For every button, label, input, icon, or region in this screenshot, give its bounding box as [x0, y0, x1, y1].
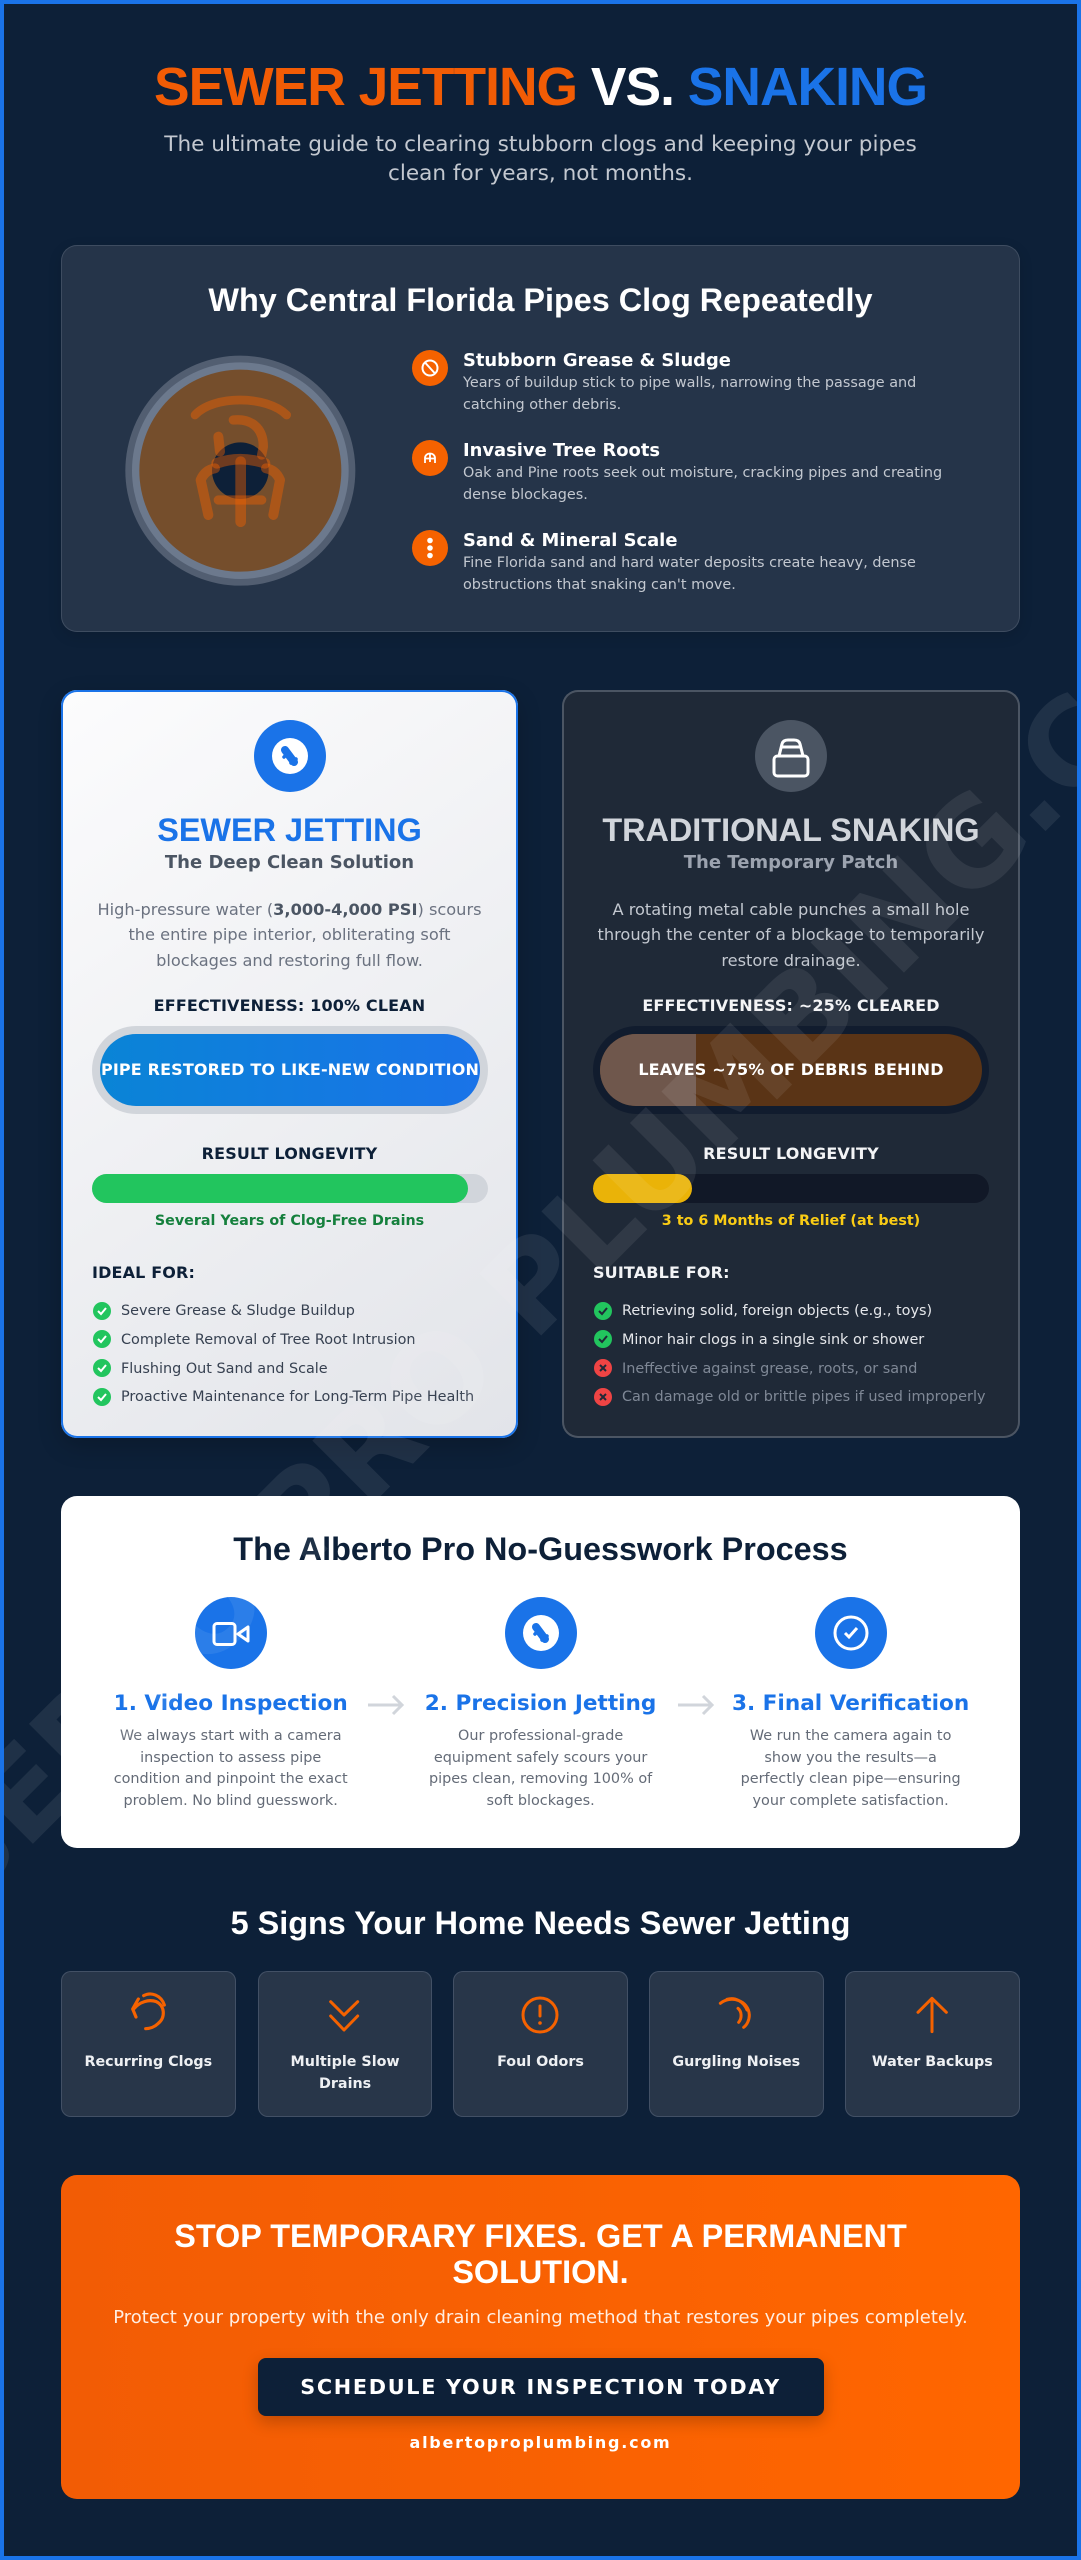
- effectiveness label: EFFECTIVENESS: ~25% CLEARED: [642, 996, 940, 1015]
- item: Minor hair clogs in a single sink or shower: [622, 1332, 924, 1348]
- description: [598, 900, 984, 970]
- cause description: [463, 465, 942, 503]
- item: Complete Removal of Tree Root Intrusion: [121, 1332, 416, 1348]
- step description: We always start with a camera: [120, 1728, 342, 1744]
- pipe text: PIPE RESTORED TO LIKE-NEW CONDITION: [101, 1060, 479, 1079]
- panel: call to action: [61, 2175, 1020, 2499]
- cause description: [463, 555, 916, 593]
- subtitle: [164, 132, 917, 186]
- step description: your complete satisfaction.: [753, 1793, 949, 1809]
- label: Foul Odors: [497, 2054, 584, 2070]
- cause title: Sand & Mineral Scale: [463, 530, 677, 551]
- subtitle: The ultimate guide to clearing stubborn clogs and keeping your pipes: [164, 132, 917, 157]
- cta heading: STOP TEMPORARY FIXES. GET A PERMANENT: [174, 2218, 907, 2254]
- checklist: suitable for: [594, 1302, 985, 1406]
- item: Proactive Maintenance for Long-Term Pipe Health: [121, 1389, 474, 1405]
- pipe fill: [100, 1034, 480, 1106]
- description: the entire pipe interior, obliterating soft: [128, 925, 451, 944]
- longevity label: RESULT LONGEVITY: [202, 1144, 377, 1163]
- step title: 1. Video Inspection: [114, 1691, 348, 1716]
- cause description: obstructions that snaking can't move.: [463, 577, 736, 593]
- item: Ineffective against grease, roots, or sand: [622, 1361, 917, 1377]
- effectiveness label: EFFECTIVENESS: 100% CLEAN: [154, 996, 425, 1015]
- step description: [114, 1728, 348, 1809]
- icon: snake tool: [755, 720, 827, 792]
- pipe diagram: 25% cleared: [593, 1026, 989, 1114]
- description: blockages and restoring full flow.: [156, 951, 423, 970]
- icon: dots: [412, 530, 448, 566]
- label: Multiple Slow: [291, 2054, 400, 2070]
- cta text: Protect your property with the only drain cleaning method that restores your pipes completely.: [113, 2306, 968, 2328]
- cta heading: SOLUTION.: [452, 2254, 629, 2290]
- description: [97, 900, 482, 970]
- step description: pipes clean, removing 100% of: [429, 1771, 652, 1787]
- longevity label: RESULT LONGEVITY: [703, 1144, 879, 1163]
- pipe fill: [600, 1034, 982, 1106]
- cause title: Invasive Tree Roots: [463, 440, 660, 461]
- step 2: [425, 1597, 656, 1809]
- label: Water Backups: [872, 2054, 993, 2070]
- heading: SEWER JETTING: [157, 812, 422, 848]
- step description: perfectly clean pipe—ensuring: [741, 1771, 961, 1787]
- website url: albertoproplumbing.com: [410, 2433, 671, 2452]
- heading: warning signs: 5 Signs Your Home Needs Sewer Jetting: [231, 1905, 850, 1941]
- cta heading: [61, 2218, 1020, 2290]
- heading: TRADITIONAL SNAKING: [602, 812, 980, 848]
- icon: double chevron: [329, 2000, 360, 2032]
- description: A rotating metal cable punches a small hole: [612, 900, 970, 918]
- sign: water backups: [845, 1971, 1020, 2117]
- item: Retrieving solid, foreign objects (e.g., toys): [622, 1303, 932, 1319]
- cause: sand and scale: [412, 530, 916, 593]
- longevity caption: 3 to 6 Months of Relief (at best): [662, 1213, 920, 1229]
- arrow: [368, 1695, 404, 1715]
- step description: problem. No blind guesswork.: [124, 1793, 338, 1809]
- label: [291, 2054, 400, 2092]
- pipe text: LEAVES ~75% OF DEBRIS BEHIND: [638, 1060, 944, 1079]
- item: Can damage old or brittle pipes if used improperly: [622, 1389, 985, 1405]
- icon: video camera: [195, 1597, 267, 1669]
- label: Recurring Clogs: [84, 2054, 212, 2070]
- step description: equipment safely scours your: [434, 1750, 647, 1766]
- pipe diagram: 100% clean: [92, 1026, 488, 1114]
- checklist: ideal for: [93, 1302, 474, 1406]
- panel: why pipes clog: [61, 245, 1020, 632]
- arrow: [678, 1695, 714, 1715]
- icon: alert circle: [516, 1991, 564, 2039]
- sign: recurring clogs: [61, 1971, 236, 2117]
- cause description: [463, 375, 916, 413]
- panel: sewer jetting: [61, 690, 518, 1438]
- list heading: SUITABLE FOR:: [593, 1263, 730, 1282]
- sign: gurgling noises: [649, 1971, 824, 2117]
- icon: prohibited: [412, 350, 448, 386]
- longevity caption: Several Years of Clog-Free Drains: [155, 1213, 424, 1229]
- icon: up arrow: [907, 1990, 957, 2040]
- step title: 2. Precision Jetting: [425, 1691, 656, 1716]
- longevity bar 95%: [92, 1174, 488, 1202]
- subtitle: clean for years, not months.: [388, 161, 693, 186]
- panel: process: [61, 1496, 1020, 1848]
- label: Gurgling Noises: [672, 2054, 800, 2070]
- icon: recurring arrow: [131, 1992, 166, 2030]
- cause description: catching other debris.: [463, 397, 621, 413]
- description: High-pressure water (3,000-4,000 PSI) scours: [97, 900, 482, 918]
- cause description: Oak and Pine roots seek out moisture, cracking pipes and creating: [463, 465, 942, 481]
- cause: tree roots: [412, 440, 942, 503]
- description: restore drainage.: [721, 951, 861, 970]
- icon: check circle: [815, 1597, 887, 1669]
- item: Flushing Out Sand and Scale: [121, 1361, 328, 1377]
- heading: why pipes clog: Why Central Florida Pipes Clog Repeatedly: [208, 282, 873, 318]
- label: Drains: [319, 2076, 371, 2092]
- subheading: The Deep Clean Solution: [165, 852, 414, 872]
- step description: We run the camera again to: [750, 1728, 951, 1744]
- step title: 3. Final Verification: [732, 1691, 969, 1716]
- heading: process: The Alberto Pro No-Guesswork Process: [233, 1531, 848, 1567]
- icon: water jet nozzle: [505, 1597, 577, 1669]
- cause title: Stubborn Grease & Sludge: [463, 350, 731, 371]
- longevity bar 25%: [593, 1174, 989, 1202]
- step 1: [114, 1597, 348, 1809]
- icon: sound arcs: [712, 1990, 762, 2040]
- panel: traditional snaking: [562, 690, 1020, 1438]
- step description: Our professional-grade: [458, 1728, 623, 1744]
- step description: [741, 1728, 961, 1809]
- illustration: clogged pipe cross-section: [125, 356, 356, 586]
- cause description: Years of buildup stick to pipe walls, narrowing the passage and: [463, 375, 916, 391]
- list heading: IDEAL FOR:: [92, 1263, 195, 1282]
- cause: grease and sludge: [412, 350, 916, 413]
- step description: condition and pinpoint the exact: [114, 1771, 348, 1787]
- cta button: [258, 2358, 824, 2416]
- step 3: [732, 1597, 969, 1809]
- step description: [429, 1728, 652, 1809]
- step description: show you the results—a: [764, 1750, 937, 1766]
- item: Severe Grease & Sludge Buildup: [121, 1303, 355, 1319]
- step description: inspection to assess pipe: [140, 1750, 321, 1766]
- sign: foul odors: [453, 1971, 628, 2117]
- title: SEWER JETTING VS. SNAKING: [154, 58, 927, 117]
- step description: soft blockages.: [487, 1793, 595, 1809]
- subheading: The Temporary Patch: [684, 852, 898, 872]
- cause description: dense blockages.: [463, 487, 588, 503]
- icon: roots: [412, 440, 448, 476]
- cta button: SCHEDULE YOUR INSPECTION TODAY: [300, 2375, 781, 2399]
- icon: water jet nozzle: [254, 720, 326, 792]
- cause description: Fine Florida sand and hard water deposits create heavy, dense: [463, 555, 916, 571]
- description: through the center of a blockage to temporarily: [598, 925, 984, 944]
- sign: multiple slow drains: [258, 1971, 432, 2117]
